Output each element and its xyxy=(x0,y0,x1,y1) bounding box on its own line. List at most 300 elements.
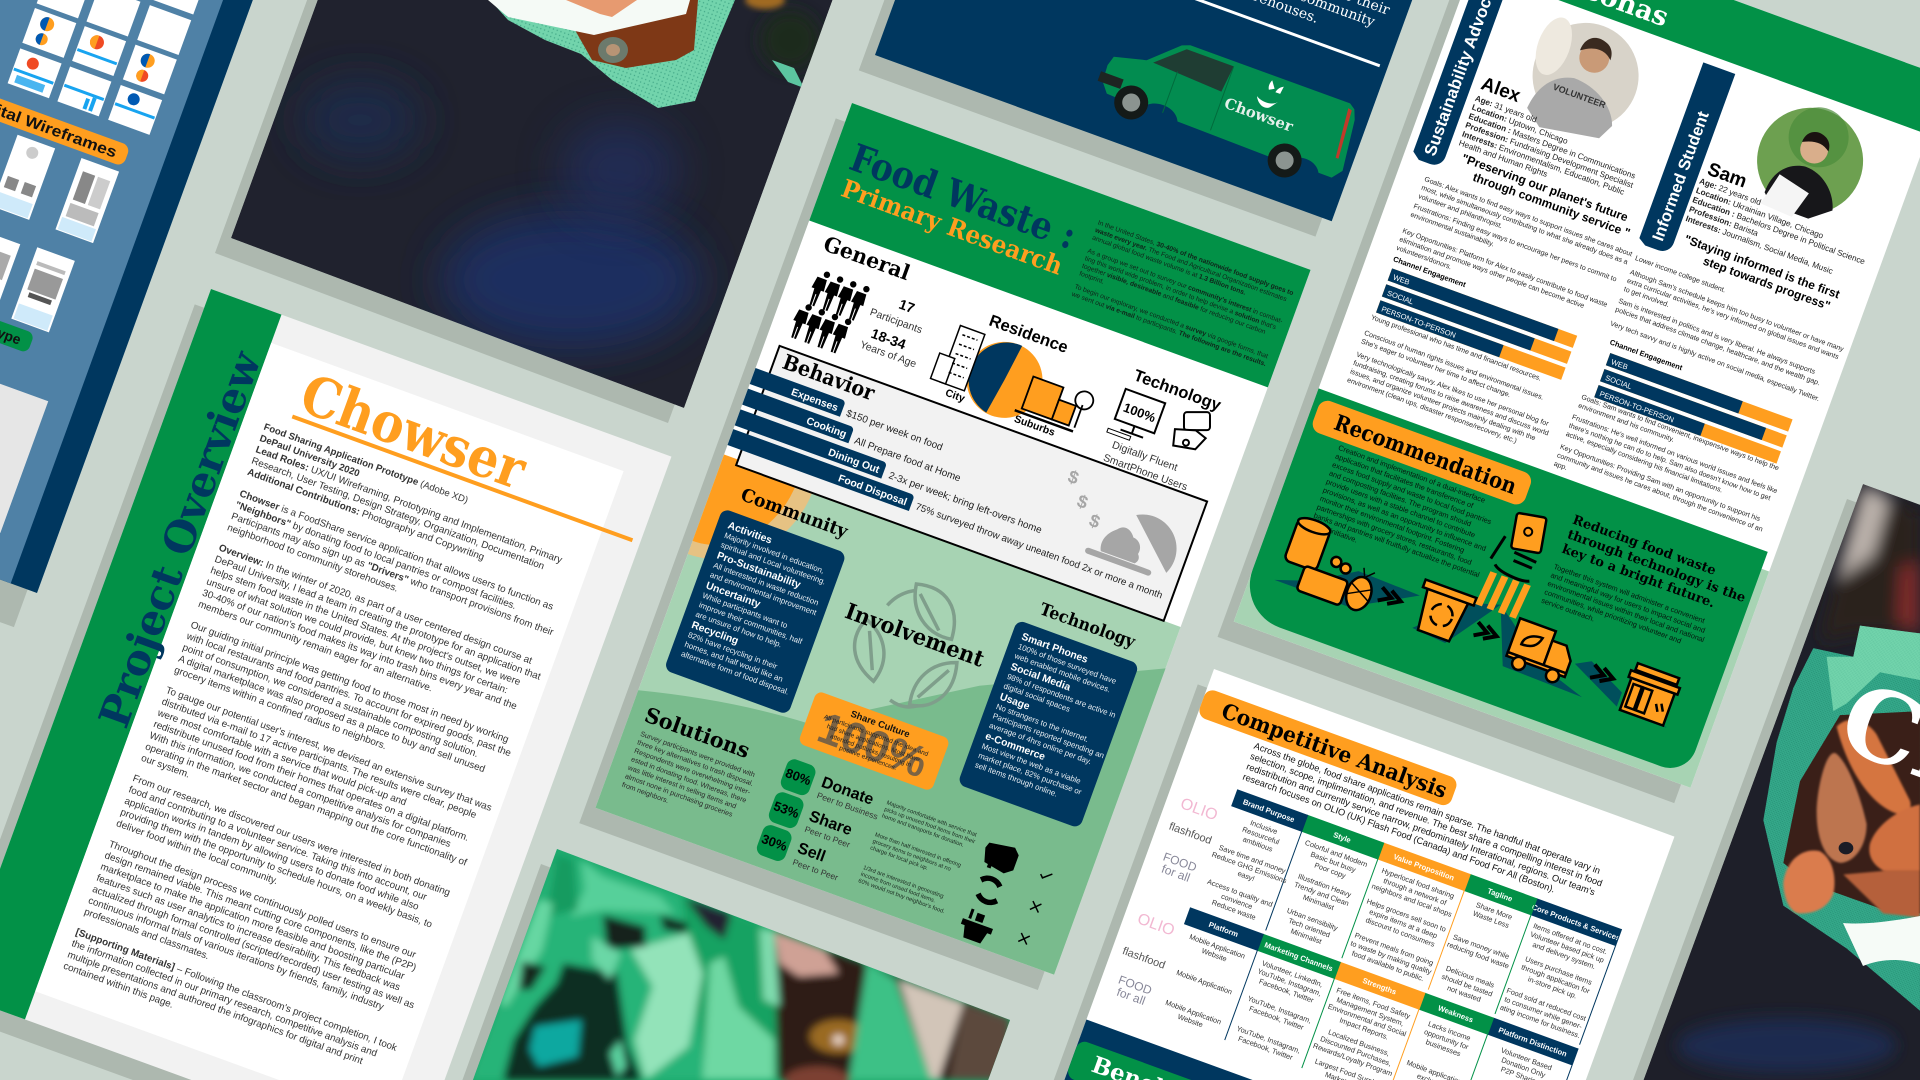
stat: share xyxy=(767,790,964,888)
table: brand comparison: easy! xyxy=(1236,869,1256,883)
persona: Alex notes: Very technologically savvy. Alex likes to use her personal blog for xyxy=(1355,351,1550,428)
table: platform comparison: YouTube, Instagram, xyxy=(1235,1024,1302,1055)
persona: Sam details: policies that address climate change, healthcare, and the wealth gap. xyxy=(1614,305,1821,387)
stat: donate: Majority comfortable with service that xyxy=(886,800,978,839)
table: brand comparison: Minimalist xyxy=(1289,926,1323,946)
intro copy xyxy=(1070,219,1294,369)
section: behavior: Behavior xyxy=(779,349,879,406)
card: community: alternative form of food disposal. xyxy=(680,649,790,697)
table: brand comparison: Hyperlocal food sharing xyxy=(1380,866,1456,901)
card: technology: Participants reported spending an xyxy=(991,711,1105,760)
logos: first table: OLIO xyxy=(1178,795,1220,824)
persona: Sam details: Education : Bachelors Degree in Political Science xyxy=(1691,195,1867,266)
project credits xyxy=(246,422,572,589)
persona: Alex details: Channel Engagement xyxy=(1392,254,1468,289)
stat: donate: picks up unused food items from their xyxy=(883,807,976,845)
body copy: To gauge our potential user's interest, we devised an extensive survey that was xyxy=(164,685,493,814)
project credits: Food Sharing Application Prototype (Adobe XD) xyxy=(262,422,469,506)
card: community: 82% have recycling in their xyxy=(687,630,779,671)
icon: chevrons 2 xyxy=(1474,622,1499,643)
icon: smartphone in hand xyxy=(1169,403,1216,456)
label: recommendation: Recommendation xyxy=(1331,410,1520,500)
logos: second table: flashfood xyxy=(1121,945,1167,972)
persona: Alex details: most, while simultaneously contributing to what she already does as a xyxy=(1420,184,1629,266)
callout: reducing food waste: environmental issues within their local and national xyxy=(1546,579,1706,644)
body copy: Participants may also sign up as "Drivers" who transport provisions from their xyxy=(230,511,555,639)
intro copy: To begin our explorary, we conducted a survey via google forms, that xyxy=(1073,283,1269,360)
body copy: providing them with the opportunity to schedule hours, on a weekly basis, to xyxy=(119,807,434,931)
body copy: deliver food within the local community. xyxy=(115,818,279,887)
community area background xyxy=(595,454,1183,975)
bar: dining out: 2-3x per week; bring left-overs home xyxy=(887,470,1044,536)
project credits: Lead Roles: UX/UI Wireframing, Prototyping and Implementation, Primary xyxy=(254,444,564,566)
persona: Alex details xyxy=(1391,65,1673,339)
table: platform comparison: Volunteer Based xyxy=(1500,1046,1553,1072)
chart: Sam channel engagement: SOCIAL xyxy=(1604,373,1633,391)
dashboard thumbnails xyxy=(8,0,206,135)
section: recommendation xyxy=(1234,388,1775,788)
body copy: professionals and classmates. xyxy=(82,907,211,962)
intro copy: As a group we set out to survey our community's interest in combat- xyxy=(1086,248,1283,325)
card: community: Uncertainty xyxy=(704,581,762,611)
table: brand comparison: Items offered at no cost. xyxy=(1532,921,1609,956)
photo: Sam xyxy=(1740,91,1879,234)
logos: first table: FOOD xyxy=(1161,849,1199,875)
recommendation copy: banks and pantries will fruitfully actualize the potential xyxy=(1312,511,1481,579)
table: platform comparison: Lacks income xyxy=(1427,1019,1472,1043)
table: platform comparison: Website xyxy=(1176,1012,1204,1029)
persona: Sam details: extra curricular activities, he's very informed on global issues and wants xyxy=(1626,277,1840,361)
icon: delivery truck xyxy=(1503,618,1578,686)
body copy: grocery items within a confined radius to neighbors. xyxy=(173,665,388,752)
body copy: features such as user analytics to increase desirability. This feedback was xyxy=(95,873,402,993)
body copy: operating in the market sector and began mapping out the core functionality of xyxy=(144,742,468,869)
persona: Alex details: "Preserving our planet's future xyxy=(1460,151,1630,224)
title: Food Waste : xyxy=(844,135,1082,258)
callout: share culture: had share applications. Most have xyxy=(826,723,921,764)
table: brand comparison: Access to quality and xyxy=(1206,877,1274,909)
icons: business, exchange and stall with marks xyxy=(954,838,1056,959)
icon: hand with phone xyxy=(1487,505,1553,583)
card: technology: web enabled mobile devices. xyxy=(1012,651,1112,694)
stat: sell: Peer to Peer xyxy=(791,857,840,883)
bar: cooking: All Prepare food at Home xyxy=(853,436,962,484)
persona: Sam notes: active, especially considering his financial limitations. xyxy=(1565,430,1724,494)
card: technology: sell items through online. xyxy=(974,760,1059,799)
table: platform comparison: YouTube, Instagram, xyxy=(1246,994,1313,1025)
table: brand comparison: Users purchase items xyxy=(1524,954,1594,987)
body copy: "Neighbors" by donating food to local pantries or compost facilities. xyxy=(234,500,518,612)
table: brand comparison: Volunteer based pick up xyxy=(1529,930,1605,965)
section: solutions: from neighbors. xyxy=(621,781,670,805)
table: brand comparison: reducing food waste xyxy=(1446,940,1510,970)
body copy: actualized through formal controlled (scripted/recorded) user testing as well as xyxy=(91,884,416,1011)
persona: Sam details: "Staying informed is the first xyxy=(1683,232,1842,301)
persona: Alex details: Profession: Fundraising Development Specialist xyxy=(1464,121,1635,190)
table: brand comparison: Illustration Heavy xyxy=(1297,872,1353,899)
persona: Sam details: Age: 22 years old xyxy=(1698,176,1763,207)
persona: Alex details: Alex xyxy=(1478,73,1523,107)
panel: project overview xyxy=(0,286,671,1080)
table: platform comparison: Mobile Application xyxy=(1188,932,1247,961)
section: behavior xyxy=(722,341,1207,621)
table: brand comparison: Style xyxy=(1332,830,1352,845)
bar: cooking: Cooking xyxy=(805,415,848,441)
table: brand comparison: should be tasted xyxy=(1440,972,1494,999)
table: platform comparison: Free items, Food Safety xyxy=(1335,986,1412,1021)
intro copy: footprint. xyxy=(1078,270,1105,286)
chart: Alex channel engagement xyxy=(1376,268,1577,380)
stat: donate: Peer to Business xyxy=(816,790,879,822)
persona: Alex notes: Conscious of human rights issues and environmental issues. xyxy=(1363,329,1545,402)
callout: reducing food waste: key to a bright future. xyxy=(1560,542,1717,611)
white logo swoosh xyxy=(1843,915,1920,966)
card: technology: 98% of respondents are active in xyxy=(1006,672,1117,720)
body copy: distributed via e-mail to 17 active participants. The results were clear, people xyxy=(160,696,478,821)
section: solutions: almost none in purchasing groceries xyxy=(624,772,734,819)
table: brand comparison: not wasted xyxy=(1446,983,1482,1004)
icon: dollars and cloche: $ xyxy=(1086,510,1103,532)
table: brand comparison: Inclusive xyxy=(1249,818,1279,836)
intro copy: annual global food waste volume is at 1.3 Billion tons. xyxy=(1091,235,1247,297)
table: brand comparison: Minimalist xyxy=(1302,893,1335,912)
persona: Sam notes: app. xyxy=(1553,460,1568,472)
persona: Alex details: volunteer and philanthropist. xyxy=(1417,192,1504,230)
section: solutions: three key alternatives to trash disposal. xyxy=(636,738,754,788)
recommendation copy: Creation and implementation of a dual-interface xyxy=(1337,443,1487,505)
table: platform comparison: Strengths xyxy=(1361,976,1398,997)
persona: Alex details: Frustrations: Finding easy ways to encourage her peers to commit to xyxy=(1412,202,1618,284)
body copy: design remained viable. This meant cutting core components, like the (P2P) xyxy=(103,850,418,974)
intro text: research focuses on OLIO (UK) Flash Food (Canada) and Food For All (Boston). xyxy=(1241,772,1556,895)
table: platform comparison: Mobile Application xyxy=(1175,968,1234,996)
process shadows xyxy=(1273,529,1687,728)
stat: share: grocery items to neighbors at no xyxy=(872,839,951,873)
persona: Sam notes xyxy=(1553,392,1786,542)
logos: second table: OLIO xyxy=(1135,911,1177,940)
tag: informed student: Informed Student xyxy=(1649,109,1713,244)
section: general: 18-34 xyxy=(869,325,908,352)
section: solutions: Solutions xyxy=(641,702,753,763)
stat: sell: 30% xyxy=(760,831,790,854)
card: community: improve their communities, half xyxy=(698,600,804,646)
table: brand comparison: to waste by making quality xyxy=(1349,939,1433,976)
body copy: A digital marketplace was also proposed as a place to buy and sell unused xyxy=(177,654,486,775)
card: technology: Most view the web as a viable xyxy=(980,742,1083,786)
callout: reducing food waste xyxy=(1540,512,1753,669)
photo: green bag close-up xyxy=(462,849,1010,1080)
table: brand comparison: Tagline xyxy=(1486,886,1514,904)
title: Primary Research xyxy=(838,174,1066,281)
table: brand comparison: Tech oriented xyxy=(1287,916,1331,939)
persona: Sam notes: environment and his community. xyxy=(1577,402,1675,444)
persona: Sam details: to get involved. xyxy=(1623,285,1670,309)
vertical heading: Project Overview xyxy=(89,344,271,734)
panel: competitive analysis xyxy=(941,666,1674,1080)
table: brand comparison: neighbors and local shops xyxy=(1371,881,1454,919)
table: brand comparison: convience xyxy=(1220,892,1254,911)
table: platform comparison: Facebook, Twitter xyxy=(1258,977,1315,1005)
section: technology: SmartPhone Users xyxy=(1102,452,1189,493)
callout: share culture xyxy=(797,690,950,793)
card: technology: 100% of those surveyed have xyxy=(1017,642,1118,686)
intro text: selection, scope, implimentation, and revenue. The best share a compelling interest in food xyxy=(1249,751,1604,888)
card: community: Community xyxy=(738,484,851,543)
body copy: multiple presentations and authored the infographics for digital and print xyxy=(66,949,364,1067)
body copy: contained within this page. xyxy=(62,961,175,1011)
bar: dining out xyxy=(735,409,1046,536)
callout: reducing food waste: through technology is the xyxy=(1565,527,1747,606)
icon: dollars and cloche xyxy=(1046,466,1193,582)
persona: Sam notes: Frustrations: He's well informed on various world issues and feels like xyxy=(1571,413,1779,495)
table: brand comparison: through a network of xyxy=(1382,876,1449,908)
table: brand comparison: Delicious meals xyxy=(1445,964,1496,990)
persona: Alex details: volunteers/donors. xyxy=(1395,244,1453,271)
bar: expenses xyxy=(750,368,946,453)
section: general: Years of Age xyxy=(858,339,918,370)
icon: monitor 100%: 100% xyxy=(1121,400,1158,425)
table: brand comparison: through application for xyxy=(1520,962,1592,996)
stat: sell xyxy=(755,823,953,921)
table: brand comparison: Food sold at reduced cost xyxy=(1505,986,1587,1023)
table: brand comparison: ating income for business. xyxy=(1499,1003,1582,1040)
section: general: Participants xyxy=(868,306,924,336)
stat: donate: Donate xyxy=(819,774,876,809)
intro copy: waste every year. The Food and Agricultural Organization estimates xyxy=(1093,227,1288,303)
recommendation copy: application that facilitates the transference of xyxy=(1334,452,1475,510)
table: platform comparison: Impact Reports. xyxy=(1338,1015,1390,1042)
table: brand comparison: and delivery system. xyxy=(1531,940,1597,971)
stat: share: More than half interested in offering xyxy=(874,832,962,869)
recommendation copy xyxy=(1309,443,1506,588)
icon: green Chowser van: Chowser xyxy=(1222,94,1296,136)
table: brand comparison: Prevent meals from going xyxy=(1353,931,1435,967)
persona: Sam details xyxy=(1603,146,1890,422)
table: platform comparison: Rewards/Loyalty Program xyxy=(1312,1041,1394,1078)
persona: Alex details: environmental sustainability. xyxy=(1409,211,1495,248)
section: general: General xyxy=(820,231,913,285)
panel: food waste primary research xyxy=(579,100,1311,993)
card: technology: market place, 82% purchase or xyxy=(977,751,1083,797)
stat: share: Peer to Peer xyxy=(803,824,852,850)
callout: reducing food waste: and meaningful way for users to impact social and xyxy=(1549,570,1707,635)
callout: share culture: positive experiences. xyxy=(838,745,898,772)
photo: carrots cover with Chowser logo xyxy=(1633,484,1920,1080)
wireframe cards xyxy=(0,135,119,339)
mesh bag xyxy=(1763,626,1920,1011)
icon: participants xyxy=(787,266,871,357)
panel: van banner xyxy=(859,0,1468,240)
persona: Alex details: Health and Human Rights xyxy=(1458,138,1549,179)
table: brand comparison: ambitious xyxy=(1242,834,1274,854)
card: technology: Social Media xyxy=(1009,662,1072,694)
icon: signal stripes xyxy=(1475,570,1531,620)
table: brand comparison: discount to consumers xyxy=(1364,915,1436,949)
table: platform comparison: Discounted Purchases, xyxy=(1319,1034,1393,1068)
table: platform comparison: Environmental and Social xyxy=(1327,1002,1408,1039)
icon: leaves xyxy=(839,569,980,720)
carrots xyxy=(1783,720,1920,917)
body copy: with local restaurants and food pantries. To account for expired goods, past the xyxy=(184,631,513,759)
title: Chowser: Chowser xyxy=(292,361,535,502)
table: brand comparison: Colorful and Modern xyxy=(1304,838,1369,869)
persona: Sam details: Channel Engagement xyxy=(1609,338,1684,372)
table: platform comparison: Platform xyxy=(1207,920,1240,939)
section: residence: Residence xyxy=(987,312,1070,357)
tag: prototype xyxy=(0,262,35,353)
card: technology: Technology xyxy=(1037,600,1139,653)
stat: share: charge for local pick up. xyxy=(869,845,929,872)
table: platform comparison: YouTube, Instagram, xyxy=(1256,966,1323,998)
bar: dining out: Dining Out xyxy=(827,446,881,476)
icon: green Chowser van xyxy=(1088,20,1365,196)
bar: food disposal: Food Disposal xyxy=(837,472,909,508)
bar: expenses: Expenses xyxy=(790,386,840,414)
callout: reducing food waste: Reducing food waste xyxy=(1570,513,1718,579)
chart: Sam channel engagement: WEB xyxy=(1610,357,1629,372)
card: community: Majority involved in education, xyxy=(723,531,825,575)
persona: Alex notes xyxy=(1346,313,1567,454)
card: community: are unsure of how to help. xyxy=(694,610,783,649)
photo: carrots in mesh bag on dark surface xyxy=(215,0,838,423)
panel: wireframe gallery xyxy=(0,0,283,631)
persona: Alex notes: environment (clean ups, disaster response/recovery, etc.) xyxy=(1346,376,1518,445)
logos: first table: for all xyxy=(1160,862,1192,885)
stat: sell: 1/3rd are interested in generating xyxy=(862,865,944,900)
persona: Sam notes: Key Opportunities: Providing Sam with an opportunity to support his xyxy=(1559,443,1762,523)
body copy: members our community remain eager for an alternative. xyxy=(197,599,434,694)
table: platform comparison xyxy=(1148,907,1578,1080)
card: community: While participants want to xyxy=(701,591,789,630)
section: benchmark xyxy=(1052,1020,1547,1080)
persona: Sam notes: community and issues he cares about, through the convenience of an xyxy=(1556,451,1764,534)
heading with recycling leaves xyxy=(822,563,1001,727)
stat: donate: 80% xyxy=(784,765,814,788)
section: general: 17 xyxy=(897,296,917,316)
persona: Sam details: Interests: Journalism, Social Media, Music xyxy=(1684,214,1834,276)
card: technology: average of 4hrs online per day. xyxy=(988,721,1093,766)
table: platform comparison: businesses xyxy=(1425,1037,1462,1058)
stat: sell: income from unsed food items. xyxy=(860,872,937,905)
callout: share culture: attended potlucks, resulting in xyxy=(829,733,912,769)
table: platform comparison: Facebook, Twitter xyxy=(1248,1004,1306,1032)
tag: informed student xyxy=(1638,62,1735,254)
logos: first table: flashfood xyxy=(1167,821,1213,847)
persona: Alex details: Age: 31 years old xyxy=(1474,94,1538,125)
prototype preview box xyxy=(0,246,48,533)
section: residence: Suburbs xyxy=(1013,413,1057,439)
persona: Alex notes: Young professional who has time and financial resources. xyxy=(1370,313,1542,383)
body copy: From our research, we discovered our users were interested in both donating xyxy=(131,773,452,899)
persona: Alex details: elimination and promote ways other people can become active xyxy=(1398,235,1585,310)
table: platform comparison: Platform Distinction xyxy=(1497,1025,1568,1059)
table: brand comparison: Brand Purpose xyxy=(1242,797,1296,824)
persona: Alex notes: issues, and organize volunteer projects mainly dealing with the xyxy=(1349,368,1537,442)
card: community: All interested in waste reduction xyxy=(712,561,820,607)
body copy: the information collected in our primary research, competitive analysis and xyxy=(70,938,379,1059)
tag: sustainability advocate xyxy=(1411,0,1530,168)
bar: food disposal: 75% surveyed throw away uneaten food 2x or more a month xyxy=(914,501,1164,601)
intro copy: In the United States, 30-40% of the nationwide food supply goes to xyxy=(1097,220,1294,297)
bar: cooking xyxy=(742,389,965,484)
section: solutions: ested in donating food. Whereas, there xyxy=(630,755,748,805)
persona: Alex details: Goals: Alex wants to find easy ways to support issues she cares about xyxy=(1423,175,1633,258)
body copy: neighborhood to community storehouses. xyxy=(226,522,400,595)
chart: Sam channel engagement xyxy=(1594,353,1793,464)
table: brand comparison: food available to public. xyxy=(1351,949,1425,983)
callout: reducing food waste: service outreach. xyxy=(1540,596,1596,623)
section: general xyxy=(787,230,949,381)
card: technology: No strangers to the internet. xyxy=(995,702,1090,744)
card: community: and environmental improvement xyxy=(709,570,818,617)
bar: food disposal xyxy=(728,429,1166,602)
persona: Sam notes: there's nothing he can do to help. Sam also doesn't know how to get xyxy=(1568,422,1772,502)
persona: Sam details: Profession: Barista xyxy=(1688,205,1760,238)
body copy: 30-40% of our nation's food makes its way into trash bins every year and the xyxy=(201,588,519,713)
card: technology: Usage xyxy=(998,692,1031,713)
body copy: Chowser is a FoodShare service application that allows users to function as xyxy=(238,489,555,613)
body copy: continuous informal trials of various iterations by friends, family, industry xyxy=(87,895,385,1013)
project credits: Research, User Testing, Design Strategy, Organization, Documentation xyxy=(250,456,546,572)
logos: second table: FOOD xyxy=(1116,973,1154,998)
project credits: Additional Contributions: Photography and Copywriting xyxy=(246,467,486,563)
chart: Alex channel engagement: SOCIAL xyxy=(1386,288,1415,306)
callout: share culture: All participants supported the idea and xyxy=(823,714,930,758)
persona: Sam notes: Goals: Sam wants to find convenient, inexpensive ways to help the xyxy=(1580,393,1780,472)
callout: reducing food waste: Together this system will administer a convenient xyxy=(1552,562,1706,625)
logos: first table xyxy=(1152,794,1223,887)
title: Chowser xyxy=(291,360,653,545)
table: brand comparison xyxy=(1194,789,1623,1045)
table: brand comparison: Save time and money xyxy=(1218,843,1287,875)
logos: second table xyxy=(1107,909,1180,1010)
section: solutions: was little interest in selling items and xyxy=(626,763,737,811)
table: brand comparison: Core Products & Services xyxy=(1531,902,1621,943)
recommendation copy: partnerships with grocery stores, restaurants, food xyxy=(1316,502,1473,567)
photo: Alex: VOLUNTEER xyxy=(1552,82,1608,110)
recommendation copy: monitor their environmental footprint. Fostering xyxy=(1319,494,1466,555)
icon: dollars and cloche: $ xyxy=(1065,466,1081,488)
chart: Alex channel engagement: WEB xyxy=(1392,273,1411,287)
icon: chevrons 1 xyxy=(1378,587,1403,608)
heading with recycling leaves: Involvement xyxy=(842,598,988,673)
persona: Alex details: Interests: Environmentalism, Education, Public xyxy=(1461,130,1626,197)
recommendation copy: of the initiative. xyxy=(1309,519,1359,545)
icon: recycling bin xyxy=(1409,580,1476,645)
intro text: redistribution and currently service narrow, predominately Interational, regions. Our team's xyxy=(1245,761,1597,898)
stat: donate: home and transports for donation. xyxy=(881,813,965,849)
section: solutions: Respondents were overwhelming inter- xyxy=(633,747,752,797)
body copy: Our guiding initial principle was getting food to those most in need by working xyxy=(189,620,510,746)
icon: storefront xyxy=(1617,662,1683,727)
persona: Sam details: Sam is interested in politics and is very liberal. He always supports xyxy=(1617,297,1817,376)
recommendation copy: excess food supply and waste to local food pantries xyxy=(1331,460,1493,526)
icon: dollars and cloche: $ xyxy=(1074,491,1091,513)
icon: chevrons 3 xyxy=(1590,665,1615,685)
tag: digital wireframes xyxy=(0,66,131,167)
logos: second table: for all xyxy=(1115,985,1147,1008)
body copy: our system. xyxy=(140,753,191,781)
project credits: DePaul University 2020 xyxy=(258,433,361,480)
table: brand comparison: Reduce GHG Emissions xyxy=(1211,850,1288,885)
icon: city xyxy=(931,322,985,391)
stat: sell: Sell xyxy=(795,840,828,866)
background blurs xyxy=(1677,486,1920,1073)
body copy: application works in tandem by allowing users to donate food while also xyxy=(123,796,421,913)
section: solutions xyxy=(619,702,768,831)
callout: share culture: 100% xyxy=(811,703,934,788)
bar: expenses: $150 per week on food xyxy=(845,408,944,453)
